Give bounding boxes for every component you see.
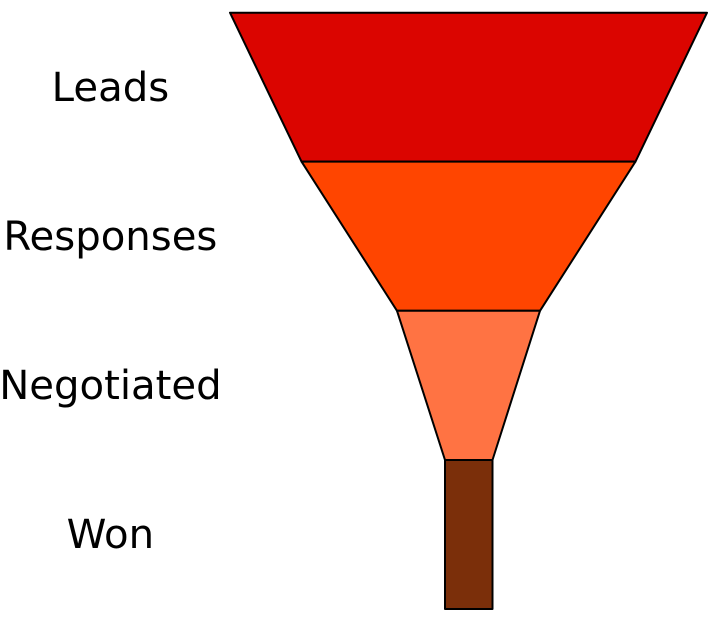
label: Negotiated: Negotiated — [0, 363, 222, 409]
funnel segment: Negotiated — [397, 311, 540, 460]
label: Won: Won — [67, 512, 154, 558]
funnel segment: Responses — [302, 162, 636, 311]
label: Leads: Leads — [52, 65, 169, 111]
funnel segment: Leads — [230, 13, 707, 162]
funnel segment: Won — [445, 460, 492, 609]
label: Responses: Responses — [3, 214, 217, 260]
